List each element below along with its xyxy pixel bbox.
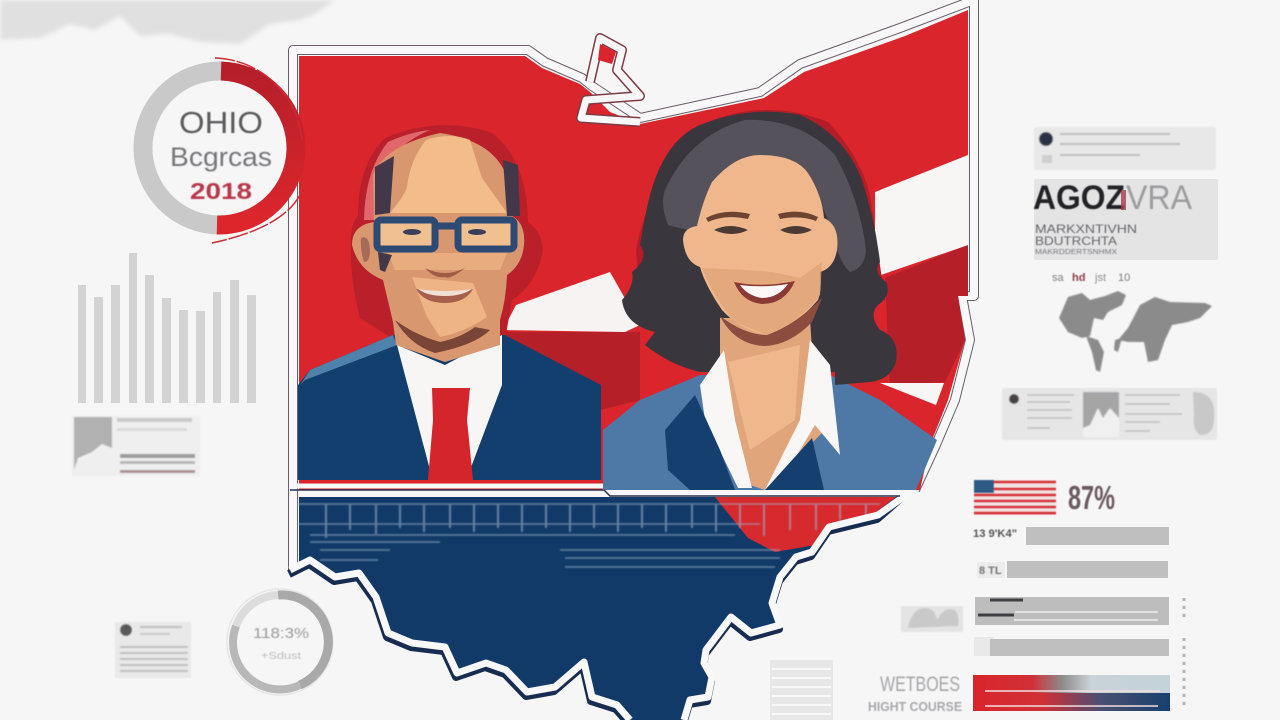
suit highlight <box>300 335 397 385</box>
woman suit <box>603 375 937 490</box>
badge dashed ring <box>212 58 302 243</box>
man neck and head <box>352 133 524 362</box>
hair highlight <box>663 120 866 272</box>
right headline card: VRA <box>1126 179 1192 217</box>
map labels: 10 <box>1118 272 1130 284</box>
peninsula north coast <box>581 38 640 122</box>
goatee <box>395 320 490 353</box>
left bar chart <box>78 253 256 403</box>
red field <box>299 10 968 490</box>
table grid <box>298 504 880 567</box>
coast white band <box>290 490 915 720</box>
dark red stripe <box>500 245 968 410</box>
small bottom icon <box>901 606 963 632</box>
map outline white <box>293 0 974 570</box>
left small card <box>72 416 200 476</box>
badge ring grey <box>143 71 221 225</box>
man halo <box>351 125 542 340</box>
flag percentage: 87% <box>1068 479 1115 516</box>
title badge <box>143 58 302 243</box>
chin shadow <box>720 298 822 346</box>
right headline card: MAKRDDERTSNHMX <box>1035 249 1117 256</box>
map labels: jst <box>1094 272 1106 284</box>
document icon <box>770 660 833 720</box>
man suit <box>298 335 601 480</box>
decorative smoke top left <box>0 0 335 44</box>
woman face <box>683 155 837 335</box>
man halo pink rim <box>364 130 430 220</box>
bar 1 <box>973 527 1169 545</box>
bar 3 <box>975 597 1169 625</box>
red wedge <box>715 497 896 552</box>
bottom donut <box>227 589 333 695</box>
white stripe left <box>503 272 640 332</box>
bottom sub heading: HIGHT COURSE <box>868 699 962 714</box>
face shade <box>702 262 822 335</box>
donut value: 118:3% <box>253 625 309 642</box>
coast shadow <box>289 498 901 720</box>
brows <box>706 212 818 222</box>
nose <box>425 268 465 278</box>
right headline card: BDUTRCHTA <box>1035 234 1117 248</box>
headline red mark <box>1121 190 1126 210</box>
bar 4 <box>974 637 1169 656</box>
side tick dots <box>1182 598 1186 710</box>
woman smile <box>734 281 795 304</box>
donut label: +Sdust <box>261 651 301 662</box>
woman red shade <box>636 110 885 300</box>
map labels <box>1052 272 1130 284</box>
ear <box>361 237 370 262</box>
man hair <box>375 156 520 272</box>
headline text: AGOZ <box>1033 179 1125 217</box>
man shirt <box>397 335 502 470</box>
bottom heading: WETBOES <box>880 673 960 696</box>
right lower card <box>1002 388 1217 440</box>
light forehead <box>390 136 507 213</box>
icon: world map <box>1059 291 1212 372</box>
bar 5 gradient <box>973 675 1170 711</box>
map labels: hd <box>1072 272 1085 284</box>
badge subtitle: Bcgrcas <box>170 142 272 172</box>
man mouth <box>416 289 473 303</box>
lit lower face <box>412 277 487 337</box>
man portrait <box>298 125 601 480</box>
white stripe right <box>875 158 968 277</box>
Ohio map <box>289 0 974 720</box>
bar 2 <box>977 561 1168 578</box>
woman blouse <box>700 340 840 490</box>
woman lapels <box>665 395 824 490</box>
bar 1: 13 9'K4" <box>973 528 1017 540</box>
headline body: MARKXNTIVHN <box>1035 222 1137 236</box>
frame divider <box>290 486 905 496</box>
glasses <box>377 220 514 249</box>
map labels: sa <box>1052 272 1064 284</box>
man tie <box>428 388 473 480</box>
right top card <box>1034 127 1216 170</box>
right headline card <box>1033 179 1218 260</box>
badge year: 2018 <box>190 178 252 204</box>
bar 2: 8 TL <box>979 565 1002 577</box>
woman neck <box>720 318 835 490</box>
badge ring red <box>217 71 296 225</box>
bottom left card <box>115 622 191 678</box>
woman portrait <box>603 110 937 490</box>
white stripe lower right <box>880 383 944 405</box>
eyes <box>714 226 812 234</box>
map outline shadow <box>293 0 974 570</box>
navy lower state <box>299 497 902 720</box>
woman hair <box>622 112 897 385</box>
US flag <box>974 480 1056 514</box>
horizontal bars <box>973 527 1184 711</box>
badge title: OHIO <box>179 105 263 140</box>
